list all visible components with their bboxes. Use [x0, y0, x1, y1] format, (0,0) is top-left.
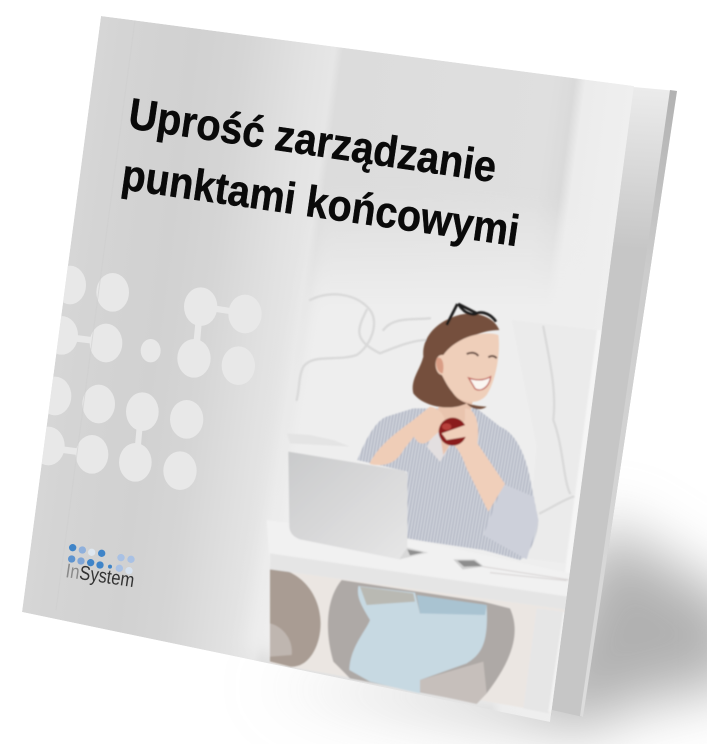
right forearm and hand: [454, 409, 505, 512]
desk top: [566, 576, 570, 596]
hair: [413, 314, 499, 409]
book spine: [550, 87, 677, 722]
smile: [469, 377, 491, 390]
decorative dot pattern: [32, 266, 262, 490]
red cup: [439, 418, 467, 446]
shirt: [357, 408, 538, 560]
InSystem logo: [66, 544, 135, 587]
left forearm and hand: [370, 407, 445, 465]
fingers over cup: [440, 424, 468, 442]
main chair: [328, 580, 515, 704]
small white shelf objects: [292, 435, 343, 446]
headline line 2: punktami końcowymi: [119, 150, 522, 256]
light wall fade into photo: [258, 240, 556, 708]
photo: woman at desk: [258, 240, 602, 713]
logo dots: [68, 544, 135, 574]
collar and neck: [426, 432, 450, 462]
glasses: [447, 304, 496, 325]
phone: [453, 559, 484, 569]
headline line 1: Uprość zarządzanie: [126, 89, 500, 192]
spine highlight on cover hinge: [76, 280, 100, 459]
shirt cuff: [483, 484, 538, 559]
logo wordmark: InSystem: [64, 560, 136, 592]
jeans: [349, 586, 487, 693]
left chair: [270, 567, 321, 667]
laptop: [288, 452, 428, 559]
below-table background: [270, 567, 570, 713]
drop shadow under book: [260, 520, 707, 730]
face: [436, 333, 499, 402]
headline: [121, 98, 519, 247]
marble wall: [297, 294, 603, 573]
spine page edge strip: [580, 90, 677, 717]
